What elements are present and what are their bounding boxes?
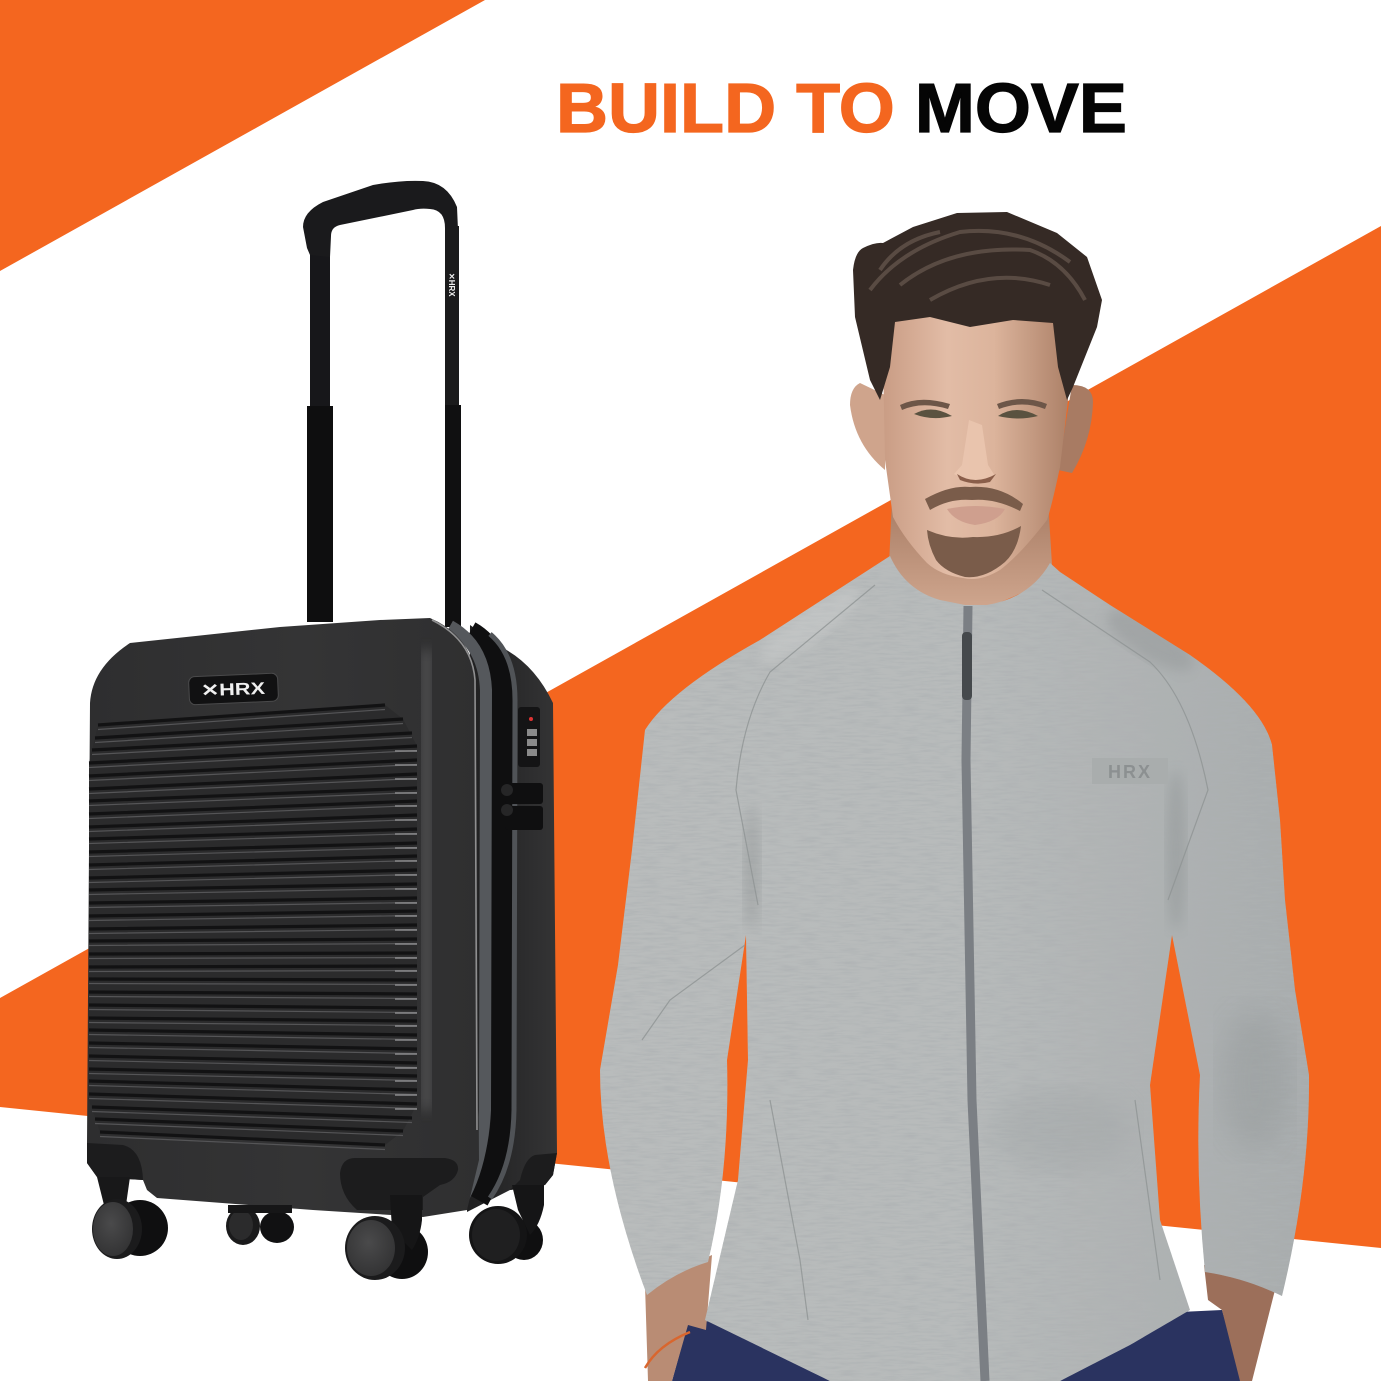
trousers: [672, 1310, 1243, 1381]
jacket seams: [642, 585, 1208, 1320]
bottom left corner guard: [87, 1143, 143, 1180]
shell edge line: [432, 620, 477, 1130]
background: top-left orange triangle: [0, 0, 485, 271]
wheel: front right: [469, 1185, 544, 1264]
zipper pull: [962, 632, 972, 700]
left wrist and hand: [645, 1255, 712, 1381]
right ear: [1058, 385, 1093, 473]
jacket chest logo: HRX: [1108, 762, 1152, 782]
badge: HRX: [188, 673, 279, 705]
shell highlight: [422, 650, 431, 1110]
jacket chest logo: [1092, 758, 1168, 784]
background: orange diagonal band: [0, 226, 1381, 1248]
ribbed panel: [89, 705, 417, 1150]
jacket shading: [744, 577, 1290, 1170]
moustache: [925, 487, 1023, 511]
shell: [87, 618, 479, 1217]
bottom centre corner guard: [340, 1158, 458, 1210]
right wrist and hand: [1204, 1265, 1275, 1381]
lips: [947, 506, 1005, 525]
handle logo: ✕HRX: [447, 273, 456, 297]
wheel: front centre: [345, 1195, 428, 1280]
telescopic handle: [303, 181, 461, 627]
zipper: [470, 632, 502, 1200]
bracelet: [645, 1332, 690, 1368]
nostril shadow: [957, 474, 996, 484]
neck: [889, 500, 1052, 608]
title: BUILD TO MOVE: [556, 69, 1127, 147]
jacket body and sleeves: [600, 556, 1309, 1381]
side panel: [467, 625, 557, 1212]
goatee: [927, 526, 1021, 577]
wheel: front left: [92, 1177, 168, 1259]
hair: [853, 212, 1102, 400]
left eye: [914, 409, 952, 418]
jacket zipper: [966, 606, 985, 1381]
bottom right corner guard: [510, 1153, 557, 1190]
hair highlights: [870, 231, 1085, 300]
suitcase: [87, 181, 557, 1280]
face: [882, 310, 1068, 579]
model: [600, 212, 1309, 1381]
nose: [954, 420, 995, 482]
wheels: [92, 1177, 544, 1280]
right eye: [998, 410, 1038, 418]
eyebrows: [900, 399, 1047, 410]
jacket: [600, 556, 1309, 1381]
zipper left band: [450, 626, 486, 1200]
badge: HRX: ✕HRX: [201, 679, 266, 700]
combination lock: [501, 707, 543, 830]
zipper right band: [490, 634, 515, 1198]
wheel: rear centre: [226, 1205, 294, 1245]
head: [850, 212, 1102, 579]
left ear: [850, 383, 885, 470]
